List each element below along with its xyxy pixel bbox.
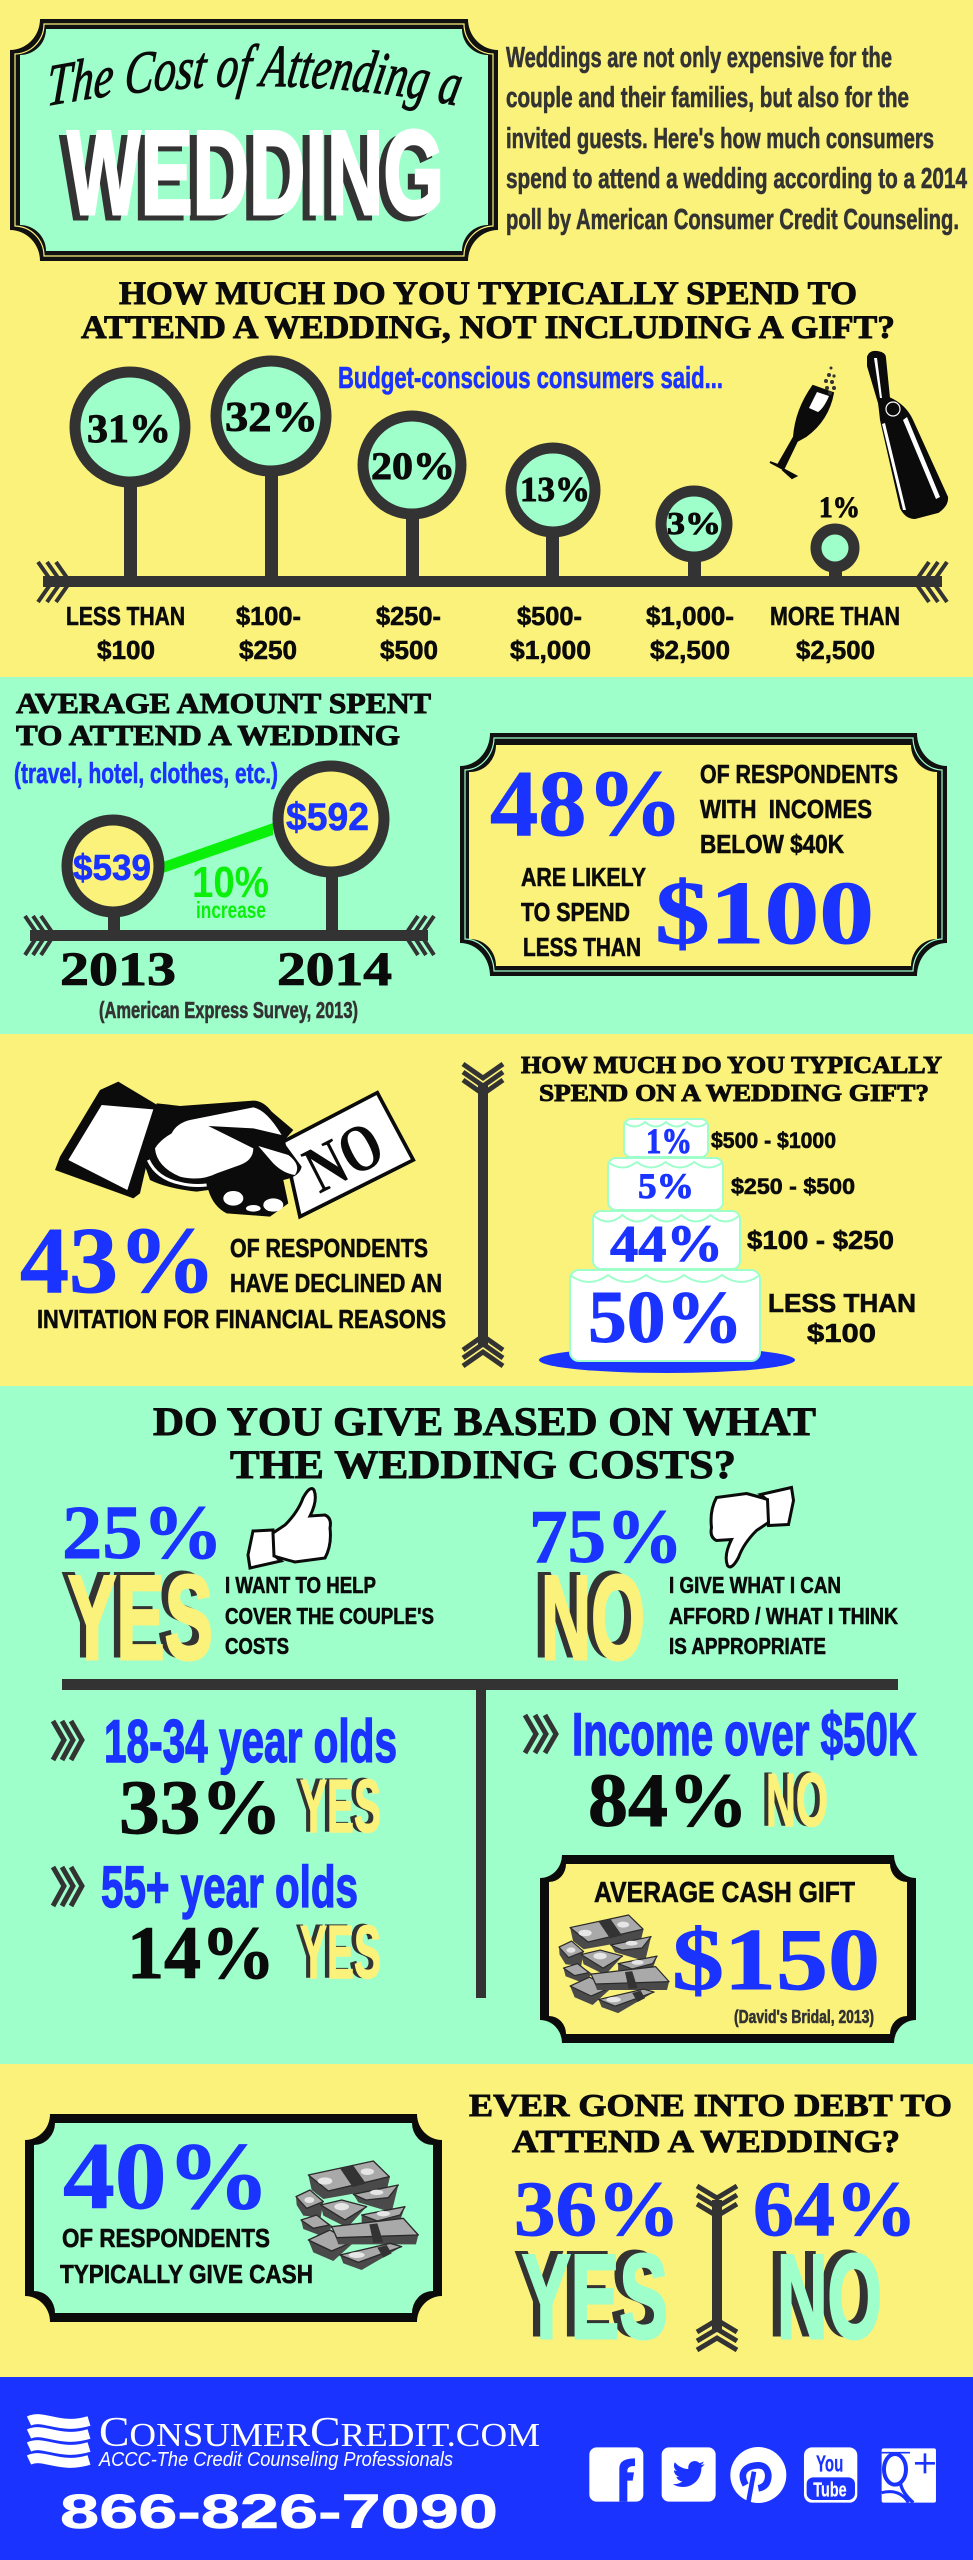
data point: 13%: 13% xyxy=(520,470,590,509)
stat: 40%: 40% xyxy=(63,2123,270,2229)
text: of respondents have declined: HAVE DECLINED AN xyxy=(230,1268,442,1298)
axis labels xyxy=(66,601,900,665)
axis labels: $2,500 xyxy=(650,635,730,665)
data point: 3% xyxy=(661,491,727,557)
chart: 2013 to 2014 increase xyxy=(25,766,434,996)
green increase line xyxy=(163,823,273,873)
text: are likely to spend less than: TO SPEND xyxy=(521,897,630,927)
arrow: vertical divider xyxy=(463,1064,503,1366)
stat: $150: $150 xyxy=(672,1912,880,2009)
reason: help cover costs: COSTS xyxy=(225,1633,289,1659)
stat: 25% yes xyxy=(62,1489,434,1685)
icon: youtube xyxy=(804,2447,857,2503)
reason: give what i can afford xyxy=(669,1572,898,1659)
stat: 75% no: 75% xyxy=(529,1495,683,1579)
lollipop stems xyxy=(124,470,842,580)
tier: 50%: 50% xyxy=(588,1277,743,1359)
breakdown: 55+ year olds: YES xyxy=(300,1910,381,1994)
breakdown: 55+ year olds: 55+ year olds xyxy=(101,1855,358,1920)
stat: 36% yes: YES xyxy=(515,2227,659,2361)
data point: 1%: 1% xyxy=(819,491,860,524)
big yes: YES xyxy=(68,1551,213,1685)
axis labels: LESS THAN xyxy=(66,601,185,631)
reason: give what i can afford: AFFORD / WHAT I THINK xyxy=(669,1603,898,1629)
breakdown: 55+ year olds: YES xyxy=(296,1909,376,1993)
stat: 64% no: 64% xyxy=(753,2165,917,2252)
heading: average amount spent xyxy=(16,688,431,752)
big no: NO xyxy=(541,1551,645,1685)
heading: gone into debt: EVER GONE INTO DEBT TO xyxy=(469,2087,952,2123)
chart: wedding cake tiers xyxy=(539,1119,916,1373)
breakdown: 55+ year olds xyxy=(53,1855,381,1995)
heading: average amount spent: TO ATTEND A WEDDING xyxy=(16,720,400,752)
icon: pinterest xyxy=(730,2447,786,2503)
heading: gone into debt: ATTEND A WEDDING? xyxy=(512,2123,900,2159)
section background: average spend mint xyxy=(0,677,973,1034)
arrow: yes no divider xyxy=(697,2186,737,2350)
phone number: 866-826-7090 xyxy=(60,2486,498,2539)
stat: 36% yes: YES xyxy=(522,2230,668,2364)
text: of respondents with incomes below $40k: WITH INCOMES xyxy=(700,794,872,824)
data point: $592 xyxy=(278,766,384,872)
intro paragraph xyxy=(506,42,967,236)
icon: hand holding no card xyxy=(55,1082,413,1217)
heading: wedding gift xyxy=(521,1053,942,1107)
big yes xyxy=(62,1548,213,1685)
title: the cost of attending a: The Cost of Attending a xyxy=(50,43,462,111)
icon: youtube: You xyxy=(816,2451,843,2477)
axis labels: $1,000- xyxy=(646,601,734,631)
no card: NO xyxy=(293,1107,395,1207)
stat: 25% yes: 25% xyxy=(62,1491,223,1575)
stems xyxy=(108,872,338,934)
heading: how much do you typically spend: ATTEND A WEDDING, NOT INCLUDING A GIFT? xyxy=(81,310,895,346)
tier: 44% xyxy=(593,1211,740,1273)
stat: 43% declined: 43% xyxy=(20,1209,216,1313)
heading: gone into debt xyxy=(469,2087,952,2159)
source: david's bridal: (David's Bridal, 2013) xyxy=(734,2007,874,2027)
data point: 13% xyxy=(511,448,595,532)
title: wedding: WEDDING xyxy=(60,111,437,245)
tier labels: $100 xyxy=(807,1318,876,1348)
axis labels: $1,000 xyxy=(510,635,591,665)
stat: 64% no: NO xyxy=(769,2227,874,2361)
data point: 32% xyxy=(216,361,326,471)
data point: 31%: 31% xyxy=(87,406,171,451)
text: of respondents with incomes below $40k xyxy=(700,759,898,859)
heading: do you give based on cost: DO YOU GIVE BASED ON WHAT xyxy=(153,1399,816,1444)
big no xyxy=(534,1548,645,1685)
axis labels: $100- xyxy=(236,601,301,631)
icon: money pile xyxy=(559,1915,669,2013)
breakdown: 55+ year olds: 14% xyxy=(127,1912,275,1995)
axis labels: $250 xyxy=(239,635,297,665)
text: of respondents have declined: INVITATION FOR FINANCIAL REASONS xyxy=(37,1304,446,1334)
stat: 43% declined xyxy=(20,1209,446,1334)
data point: 20% xyxy=(363,416,461,514)
cuff xyxy=(55,1082,160,1198)
year labels: 2013 xyxy=(60,943,176,996)
subheading: budget-conscious consumers said: Budget-conscious consumers said... xyxy=(338,360,723,395)
year labels xyxy=(60,943,392,996)
breakdown: income over $50k: NO xyxy=(766,1758,828,1842)
heading: how much do you typically spend xyxy=(81,276,895,346)
text: are likely to spend less than: ARE LIKELY xyxy=(521,862,646,892)
breakdown: income over $50k xyxy=(525,1701,917,1843)
heading: how much do you typically spend: HOW MUCH DO YOU TYPICALLY SPEND TO xyxy=(119,276,857,312)
text: of respondents with incomes below $40k: OF RESPONDENTS xyxy=(700,759,898,789)
tier labels: $500 - $1000 xyxy=(711,1128,836,1153)
breakdown: 18-34 year olds: 33% xyxy=(119,1764,282,1850)
breakdown: 18-34 year olds xyxy=(53,1708,397,1850)
data point: 32%: 32% xyxy=(225,395,318,441)
title: wedding xyxy=(60,106,444,245)
logo: consumercredit.com wordmark: CONSUMER CREDIT.COM xyxy=(99,2410,540,2456)
data point: $539 xyxy=(67,820,159,912)
text: of respondents typically give cash xyxy=(60,2223,313,2289)
tier labels xyxy=(711,1128,916,1348)
data point: $592: $592 xyxy=(286,796,369,839)
breakdown: income over $50k: NO xyxy=(762,1757,823,1841)
big yes: YES xyxy=(62,1548,206,1682)
section background: intro yellow xyxy=(0,0,973,677)
title plaque xyxy=(10,19,498,261)
text: of respondents typically give cash: OF RESPONDENTS xyxy=(62,2223,270,2253)
text: of respondents with incomes below $40k: BELOW $40K xyxy=(700,829,844,859)
section background: footer blue xyxy=(0,2377,973,2560)
tier: 1%: 1% xyxy=(646,1121,692,1161)
reason: give what i can afford: I GIVE WHAT I CAN xyxy=(669,1572,841,1598)
data point: $539: $539 xyxy=(73,847,151,888)
reason: give what i can afford: IS APPROPRIATE xyxy=(669,1633,826,1659)
title: wedding: WEDDING xyxy=(67,106,444,240)
data point: 20%: 20% xyxy=(371,445,455,488)
chart: lollipop timeline of spend xyxy=(38,361,947,665)
reason: help cover costs: I WANT TO HELP xyxy=(225,1572,376,1598)
tier labels: $100 - $250 xyxy=(747,1225,894,1255)
text: of respondents typically give cash: TYPICALLY GIVE CASH xyxy=(60,2259,313,2289)
tagline: ACCC-The Credit Counseling Professionals xyxy=(98,2449,453,2471)
heading: average amount spent: AVERAGE AMOUNT SPENT xyxy=(16,688,431,720)
breakdown: 18-34 year olds: 18-34 year olds xyxy=(104,1708,397,1775)
social icons xyxy=(589,2447,936,2503)
big no: NO xyxy=(534,1548,638,1682)
icon: champagne bottle xyxy=(868,352,947,518)
icon: thumbs up xyxy=(248,1489,330,1568)
label: 10% increase xyxy=(192,858,269,923)
data point: 1% xyxy=(816,491,860,567)
reason: help cover costs: COVER THE COUPLE'S xyxy=(225,1603,434,1629)
heading: wedding gift: HOW MUCH DO YOU TYPICALLY xyxy=(521,1053,942,1079)
axis labels: $500 xyxy=(380,635,438,665)
breakdown: 18-34 year olds: YES xyxy=(296,1763,376,1847)
text: are likely to spend less than: LESS THAN xyxy=(523,932,641,962)
panel: 40% give cash xyxy=(25,2114,442,2322)
arrow: year axis xyxy=(25,916,434,955)
stat: 36% yes: 36% xyxy=(514,2165,680,2252)
stat: 64% no xyxy=(753,2165,917,2364)
tier labels: LESS THAN xyxy=(768,1288,916,1318)
icon: thumbs down xyxy=(711,1488,794,1567)
icon: google plus xyxy=(882,2448,936,2503)
label: average cash gift: AVERAGE CASH GIFT xyxy=(594,1877,855,1909)
stat: 36% yes xyxy=(514,2165,680,2364)
axis labels: $100 xyxy=(97,635,155,665)
tier: 5%: 5% xyxy=(638,1166,694,1206)
subheading: travel, hotel, clothes: (travel, hotel, clothes, etc.) xyxy=(14,758,278,790)
heading: do you give based on cost: THE WEDDING COSTS? xyxy=(230,1442,736,1487)
source: american express survey: (American Express Survey, 2013) xyxy=(99,997,358,1023)
data point: 3%: 3% xyxy=(667,505,721,541)
text: of respondents have declined xyxy=(37,1233,446,1334)
reason: help cover costs xyxy=(225,1572,434,1659)
panel: average cash gift xyxy=(540,1855,916,2043)
icon: money pile xyxy=(296,2161,418,2270)
tier: 44%: 44% xyxy=(610,1216,723,1273)
arrow: timeline axis xyxy=(38,562,947,602)
axis labels: $500- xyxy=(517,601,582,631)
stat: $100: $100 xyxy=(655,864,874,963)
stat: 48%: 48% xyxy=(490,752,683,856)
stat: 64% no: NO xyxy=(777,2230,882,2364)
axis labels: $2,500 xyxy=(796,635,875,665)
stat: 75% no xyxy=(529,1488,898,1685)
section background: give based on cost mint xyxy=(0,1386,973,2064)
icon: twitter xyxy=(662,2447,716,2502)
panel: 48% of respondents xyxy=(460,733,947,976)
label: 10% increase: increase xyxy=(196,897,266,923)
icon: facebook xyxy=(589,2447,643,2502)
text: are likely to spend less than xyxy=(521,862,646,962)
tier: 5% xyxy=(608,1158,723,1210)
section background: cash and debt yellow xyxy=(0,2064,973,2377)
data point: 31% xyxy=(75,372,185,482)
icon: champagne flute xyxy=(770,366,836,478)
heading: do you give based on cost xyxy=(153,1399,816,1487)
logo: consumercredit waves xyxy=(29,2419,89,2463)
breakdown: 18-34 year olds: YES xyxy=(300,1764,381,1848)
icon: youtube: Tube xyxy=(813,2480,847,2502)
tier: 1% xyxy=(624,1119,708,1161)
axis labels: MORE THAN xyxy=(770,601,900,631)
breakdown: income over $50k: 84% xyxy=(588,1759,748,1843)
hand xyxy=(142,1101,302,1217)
section background: declined and gift yellow xyxy=(0,1034,973,1386)
tier labels: $250 - $500 xyxy=(731,1174,855,1199)
heading: wedding gift: SPEND ON A WEDDING GIFT? xyxy=(539,1081,929,1107)
text: of respondents have declined: OF RESPONDENTS xyxy=(230,1233,428,1263)
axis labels: $250- xyxy=(376,601,441,631)
label: 10% increase: 10% xyxy=(192,858,269,907)
cake plate xyxy=(539,1347,795,1373)
year labels: 2014 xyxy=(277,943,392,996)
divider: t-shaped rule xyxy=(62,1679,898,1998)
